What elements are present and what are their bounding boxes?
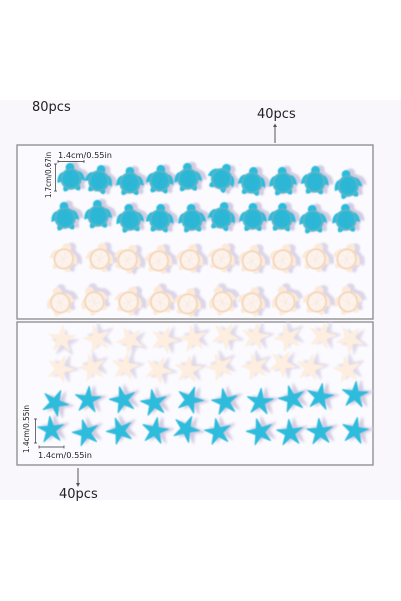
row: cream starfish 2 [44,344,366,387]
label: turtle count 40pcs: 40pcs [257,107,296,122]
dimension: starfish height: 1.4cm/0.55in [22,405,31,453]
row: cream turtles 1 [47,237,370,279]
label: starfish count 40pcs: 40pcs [59,487,98,502]
background band [0,100,401,500]
dimension: starfish width: 1.4cm/0.55in [38,451,92,460]
row: teal starfish 2 [37,410,375,447]
dimension: turtle height [44,152,57,198]
row: teal turtles 2 [50,198,365,234]
panel: starfish beads [17,316,375,465]
arrow: starfish panel pointer [76,468,80,487]
row: teal starfish 1 [39,379,374,420]
panel: turtle beads [17,145,373,320]
dimension: turtle width: 1.4cm/0.55in [58,151,112,160]
dimension: turtle height: 1.7cm/0.67in [44,152,53,198]
row: cream starfish 1 [48,316,374,360]
row: cream turtles 2 [42,278,369,320]
dimension: starfish height [22,405,37,453]
heading: total count 80pcs: 80pcs [32,100,71,115]
row: teal turtles 1 [56,158,369,200]
dimension: starfish width [38,446,92,460]
arrow: turtle panel pointer [273,124,277,143]
